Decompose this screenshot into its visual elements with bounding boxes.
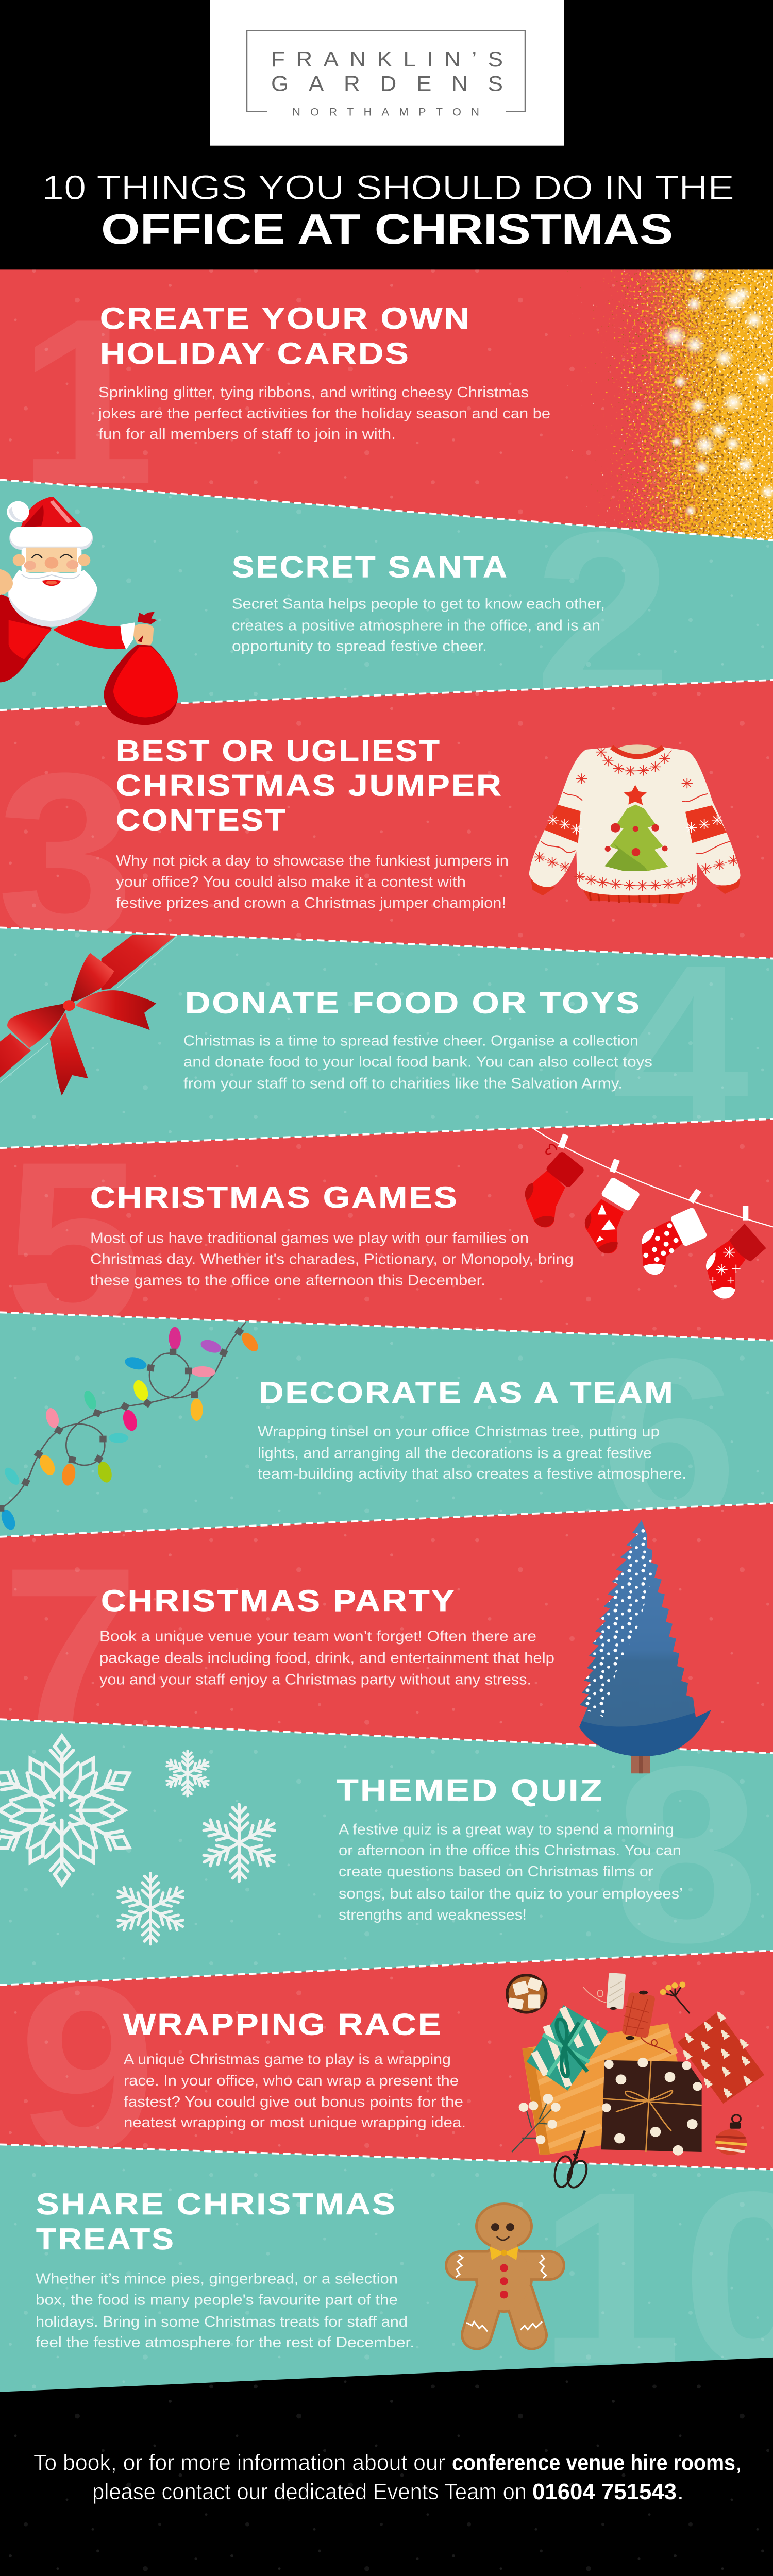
- feathery snowflake: [114, 1873, 187, 1944]
- body text: holidays. Bring in some Christmas treats for staff and: [36, 2313, 408, 2330]
- body text: or afternoon in the office this Christmas. You can: [339, 1842, 681, 1859]
- body text: Christmas day. Whether it's charades, Pictionary, or Monopoly, bring: [90, 1251, 574, 1268]
- panel: 6 decorate as a team: [0, 1313, 773, 1538]
- body text: you and your staff enjoy a Christmas party without any stress.: [99, 1671, 531, 1688]
- icon: red ribbon bow: [0, 935, 177, 1096]
- body text: [183, 1032, 652, 1092]
- body text: [36, 2270, 414, 2351]
- title: [42, 168, 734, 252]
- body text: from your staff to send off to charities like the Salvation Army.: [183, 1075, 623, 1092]
- body text: opportunity to spread festive cheer.: [232, 638, 487, 654]
- panel: 5 Christmas games: [0, 1119, 773, 1342]
- body text: [124, 2051, 466, 2131]
- heading: CONTEST: [116, 803, 287, 837]
- footer text: conference venue hire rooms: [452, 2450, 735, 2475]
- body text: create questions based on Christmas films or: [339, 1863, 653, 1880]
- body text: [258, 1423, 686, 1482]
- footer text: ,: [735, 2450, 742, 2475]
- body text: fastest? You could give out bonus points for the: [124, 2093, 463, 2110]
- body text: Book a unique venue your team won’t forget! Often there are: [99, 1628, 536, 1645]
- heading: [36, 2187, 397, 2256]
- footer panel: [0, 2352, 773, 2576]
- dark polka-dot gift: [601, 2058, 702, 2156]
- body text: feel the festive atmosphere for the rest of December.: [36, 2334, 414, 2351]
- Santa body: [0, 594, 52, 682]
- icon: Santa with sack: [0, 497, 178, 725]
- body text: box, the food is many people's favourite part of the: [36, 2292, 398, 2309]
- icon: wrapped presents: [506, 1973, 764, 2190]
- panel: 8 themed quiz: [0, 1714, 773, 1994]
- panel: 4 donate food or toys: [0, 928, 773, 1149]
- number 2: 2: [534, 483, 671, 747]
- icon: snowflakes: [0, 1736, 278, 1944]
- face: [22, 548, 81, 572]
- body text: Why not pick a day to showcase the funkiest jumpers in: [116, 853, 509, 869]
- waving hand: [0, 569, 13, 595]
- body text: package deals including food, drink, and entertainment that help: [99, 1650, 554, 1666]
- hot chocolate: [506, 1974, 547, 2014]
- body text: festive prizes and crown a Christmas jumper champion!: [116, 895, 506, 911]
- number 7: 7: [2, 1519, 139, 1783]
- body text: [99, 1628, 554, 1688]
- number 1: 1: [18, 270, 155, 534]
- number 3: 3: [0, 724, 134, 988]
- body text: A unique Christmas game to play is a wrapping: [124, 2051, 451, 2068]
- body text: strengths and weaknesses!: [339, 1906, 527, 1923]
- stocking 4: [706, 1224, 766, 1299]
- panel: 10 share Christmas treats: [0, 2144, 773, 2392]
- number 4: 4: [612, 916, 751, 1180]
- title: OFFICE AT CHRISTMAS: [101, 206, 673, 252]
- heading: CHRISTMAS JUMPER: [116, 769, 503, 802]
- footer text: .: [677, 2479, 684, 2504]
- small snowflake: [164, 1751, 211, 1796]
- heading: WRAPPING RACE: [123, 2008, 443, 2041]
- body text: creates a positive atmosphere in the office, and is an: [232, 617, 600, 634]
- footer text: please contact our dedicated Events Team on: [92, 2479, 527, 2504]
- number 5: 5: [5, 1113, 142, 1377]
- body text: neatest wrapping or most unique wrapping idea.: [124, 2114, 466, 2131]
- heading: CHRISTMAS PARTY: [101, 1584, 456, 1618]
- icon: blue Christmas tree: [572, 1520, 716, 1773]
- sack: [104, 645, 178, 725]
- body text: [98, 384, 550, 443]
- body text: Secret Santa helps people to get to know each other,: [232, 596, 605, 612]
- header: [42, 0, 734, 252]
- logo panel: FRANKLIN’S: [271, 47, 503, 72]
- thread spools: [583, 1973, 671, 2054]
- body text: [339, 1821, 683, 1923]
- stocking 1: [525, 1144, 585, 1227]
- logo panel: NORTHAMPTON: [292, 106, 479, 118]
- body text: [232, 596, 605, 654]
- icon: gingerbread man: [456, 2202, 549, 2335]
- body text: jokes are the perfect activities for the holiday season and can be: [98, 405, 550, 422]
- body text: [90, 1230, 574, 1289]
- panel: 9 wrapping race: [0, 1937, 773, 2201]
- footer text: To book, or for more information about our: [33, 2450, 445, 2475]
- body text: Most of us have traditional games we play with our families on: [90, 1230, 529, 1246]
- heading: SECRET SANTA: [232, 550, 509, 584]
- heading: CREATE YOUR OWN: [100, 301, 471, 335]
- heading: DECORATE AS A TEAM: [259, 1376, 675, 1410]
- red tree-pattern gift: [678, 2009, 764, 2104]
- footer text: [33, 2450, 742, 2504]
- icon: hanging stockings: [525, 1128, 773, 1299]
- body text: Sprinkling glitter, tying ribbons, and writing cheesy Christmas: [98, 384, 529, 401]
- glitter edge: [567, 267, 773, 545]
- bauble: [715, 2115, 747, 2155]
- heading: SHARE CHRISTMAS: [36, 2187, 397, 2221]
- orange wrapping paper: [522, 2023, 678, 2155]
- body text: and donate food to your local food bank. You can also collect toys: [183, 1054, 652, 1071]
- berry sprig: [660, 1982, 690, 2013]
- beard: [8, 570, 97, 627]
- logo panel: [210, 0, 564, 146]
- body text: songs, but also tailor the quiz to your employees’: [339, 1885, 683, 1902]
- body text: Christmas is a time to spread festive cheer. Organise a collection: [183, 1032, 638, 1049]
- number 6: 6: [600, 1310, 737, 1573]
- body text: lights, and arranging all the decorations is a great festive: [258, 1445, 652, 1462]
- body text: team-building activity that also creates a festive atmosphere.: [258, 1466, 686, 1482]
- body text: [116, 853, 509, 911]
- body text: Wrapping tinsel on your office Christmas tree, putting up: [258, 1423, 660, 1440]
- medium snowflake: [200, 1804, 278, 1881]
- body text: these games to the office one afternoon this December.: [90, 1272, 485, 1289]
- panel: 2 secret santa: [0, 480, 773, 747]
- white berries: [512, 2094, 561, 2152]
- body text: fun for all members of staff to join in with.: [98, 426, 396, 443]
- heading: BEST OR UGLIEST: [116, 734, 441, 768]
- body text: A festive quiz is a great way to spend a morning: [339, 1821, 674, 1838]
- heading: TREATS: [36, 2222, 175, 2256]
- heading: [116, 734, 503, 837]
- stocking 2: [585, 1177, 641, 1253]
- heading: DONATE FOOD OR TOYS: [185, 986, 641, 1020]
- green gift: [527, 2005, 608, 2091]
- icon: Christmas jumper: [529, 744, 741, 904]
- large snowflake: [0, 1736, 138, 1885]
- scissors: [552, 2131, 590, 2190]
- footer text: 01604 751543: [532, 2479, 677, 2504]
- title: 10 THINGS YOU SHOULD DO IN THE: [42, 168, 734, 207]
- panel: 3 best or ugliest jumper contest: [0, 680, 773, 988]
- number 8: 8: [613, 1714, 760, 1994]
- panel: 1 create your own holiday cards: [0, 267, 773, 545]
- heading: CHRISTMAS GAMES: [90, 1180, 459, 1214]
- number 9: 9: [19, 1937, 156, 2201]
- heading: [100, 301, 471, 370]
- heading: THEMED QUIZ: [337, 1773, 604, 1807]
- icon: string of fairy lights: [0, 1322, 261, 1532]
- body text: Whether it’s mince pies, gingerbread, or a selection: [36, 2270, 398, 2287]
- body text: your office? You could also make it a contest with: [116, 874, 466, 890]
- body text: race. In your office, who can wrap a present the: [124, 2072, 459, 2089]
- panel: 7 Christmas party: [0, 1503, 773, 1783]
- logo panel: GARDENS: [271, 72, 503, 96]
- hat: [21, 497, 82, 528]
- heading: HOLIDAY CARDS: [100, 336, 410, 370]
- stocking 3: [642, 1207, 708, 1275]
